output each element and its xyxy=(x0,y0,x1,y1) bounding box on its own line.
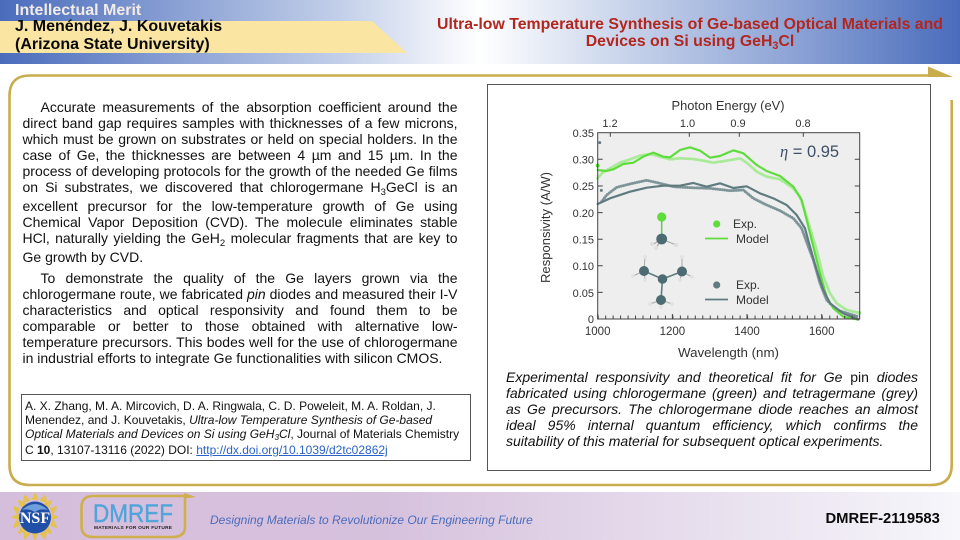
paragraph 1: Chemical Vapor Deposition (CVD). The molecule eliminates stable xyxy=(22,214,458,230)
DMREF logo: MATERIALS FOR OUR FUTURE xyxy=(94,525,173,531)
authors: (Arizona State University) xyxy=(15,36,210,53)
figure caption: as Ge precursors. The chlorogermane diode reaches an almost xyxy=(506,401,918,417)
efficiency annotation: η = 0.95 xyxy=(780,142,839,161)
figure caption: suitability of this material for subsequent optical experiments. xyxy=(506,433,883,449)
grey model xyxy=(598,183,858,319)
figure caption: ideal 95% internal quantum efficiency, which confirms the xyxy=(506,417,918,433)
tagline: Designing Materials to Revolutionize Our Engineering Future xyxy=(210,512,533,526)
top axis labels: 0.8 xyxy=(795,118,811,130)
authors xyxy=(15,18,222,53)
section label: Intellectual Merit xyxy=(15,2,141,19)
molecule: chlorogermane xyxy=(650,212,678,250)
icon: NSF logo: NSF xyxy=(20,510,50,526)
paragraph 2: To demonstrate the quality of the Ge layers grown via the xyxy=(40,270,458,286)
paragraph 2: comparable or better to those obtained with alternative low- xyxy=(22,318,458,334)
x axis labels: 1600 xyxy=(809,326,834,338)
paragraph 2 xyxy=(22,270,458,366)
legend: Exp. xyxy=(736,278,760,292)
plot area xyxy=(598,133,860,319)
responsivity chart xyxy=(538,98,862,360)
title xyxy=(437,16,943,52)
paragraph 1: case of Ge, the thicknesses are between 4 µm and 15 µm. In the xyxy=(22,147,458,163)
top axis labels: 1.0 xyxy=(680,118,695,130)
y axis title: Responsivity (A/W) xyxy=(538,172,553,283)
curves xyxy=(596,141,861,320)
paragraph 1: which must be grown on substrates or held on special holders. In the xyxy=(22,131,458,147)
axes xyxy=(598,133,860,319)
grey experiment xyxy=(602,180,858,317)
y axis labels: 0.30 xyxy=(573,154,594,166)
x axis title: Wavelength (nm) xyxy=(678,345,779,360)
award number: DMREF-2119583 xyxy=(826,511,940,527)
y axis labels: 0 xyxy=(588,314,594,326)
molecule: tetragermane xyxy=(631,255,694,309)
y axis labels: 0.10 xyxy=(573,261,594,273)
top axis labels xyxy=(602,118,811,130)
DMREF logo xyxy=(80,493,196,538)
DMREF logo: DMREF xyxy=(93,501,173,528)
authors: J. Menéndez, J. Kouvetakis xyxy=(15,18,222,35)
y axis labels: 0.35 xyxy=(573,128,594,140)
citation box: Menendez, and J. Kouvetakis, Ultra-low Temperature Synthesis of Ge-based xyxy=(25,413,432,427)
body text xyxy=(22,99,458,366)
x axis labels: 1200 xyxy=(660,326,685,338)
paragraph 1: on Si substrates, we discovered that chlorogermane H3GeCl is an xyxy=(22,179,458,198)
icon: NSF logo xyxy=(12,493,58,540)
legend xyxy=(705,217,769,307)
citation box: Optical Materials and Devices on Si using GeH3Cl, Journal of Materials Chemistry xyxy=(25,426,459,442)
gold frame with arrow xyxy=(8,66,953,486)
footer band xyxy=(0,492,960,540)
title: Devices on Si using GeH3Cl xyxy=(586,33,794,52)
top axis labels: 0.9 xyxy=(730,118,746,130)
paragraph 2: characteristics and optical responsivity and found them to be xyxy=(22,302,458,318)
figure panel xyxy=(486,84,930,471)
x axis labels: 1000 xyxy=(585,326,610,338)
top axis title: Photon Energy (eV) xyxy=(672,98,784,113)
header banner xyxy=(0,0,960,64)
legend: Model xyxy=(736,232,769,246)
figure caption: Experimental responsivity and theoretical fit for Ge pin diodes xyxy=(506,369,918,385)
citation box: A. X. Zhang, M. A. Mircovich, D. A. Ringwala, C. D. Poweleit, M. A. Roldan, J. xyxy=(25,399,436,413)
green experiment xyxy=(598,154,858,313)
paragraph 2: in industrial efforts to integrate Ge functionalities with silicon CMOS. xyxy=(22,350,442,366)
y axis labels: 0.20 xyxy=(573,208,594,220)
y axis labels: 0.15 xyxy=(573,234,594,246)
figure caption xyxy=(506,369,918,449)
top axis labels: 1.2 xyxy=(602,118,618,130)
y axis labels xyxy=(573,128,594,326)
title: Ultra-low Temperature Synthesis of Ge-based Optical Materials and xyxy=(437,16,943,33)
paragraph 1: Accurate measurements of the absorption coefficient around the xyxy=(40,99,458,115)
paragraph 1: excellent precursor for the low-temperature growth of Ge using xyxy=(22,198,458,214)
y axis labels: 0.05 xyxy=(573,288,594,300)
paragraph 1: process of developing protocols for the growth of the needed Ge films xyxy=(22,163,458,179)
paragraph 2: chlorogermane route, we fabricated pin diodes and measured their I-V xyxy=(22,286,458,302)
citation box: C 10, 13107-13116 (2022) DOI: http://dx.doi.org/10.1039/d2tc02862j xyxy=(25,443,388,457)
y axis labels: 0.25 xyxy=(573,181,594,193)
paragraph 1 xyxy=(22,99,458,265)
paragraph 1: HCl, naturally yielding the GeH2 molecular fragments that are key to xyxy=(22,230,458,249)
paragraph 2: temperature precursors. This bodes well for the use of chlorogermane xyxy=(22,334,458,350)
paragraph 1: direct band gap requires samples with thicknesses of a few microns, xyxy=(22,115,458,131)
paragraph 1: Ge growth by CVD. xyxy=(22,249,143,265)
legend: Exp. xyxy=(733,217,757,231)
legend: Model xyxy=(736,293,769,307)
author ribbon xyxy=(0,21,407,53)
green model xyxy=(598,147,858,320)
x axis labels: 1400 xyxy=(734,326,760,338)
x axis labels xyxy=(585,326,834,338)
figure caption: fabricated using chlorogermane (green) and tetragermane (grey) xyxy=(506,385,918,401)
citation box xyxy=(20,394,470,461)
